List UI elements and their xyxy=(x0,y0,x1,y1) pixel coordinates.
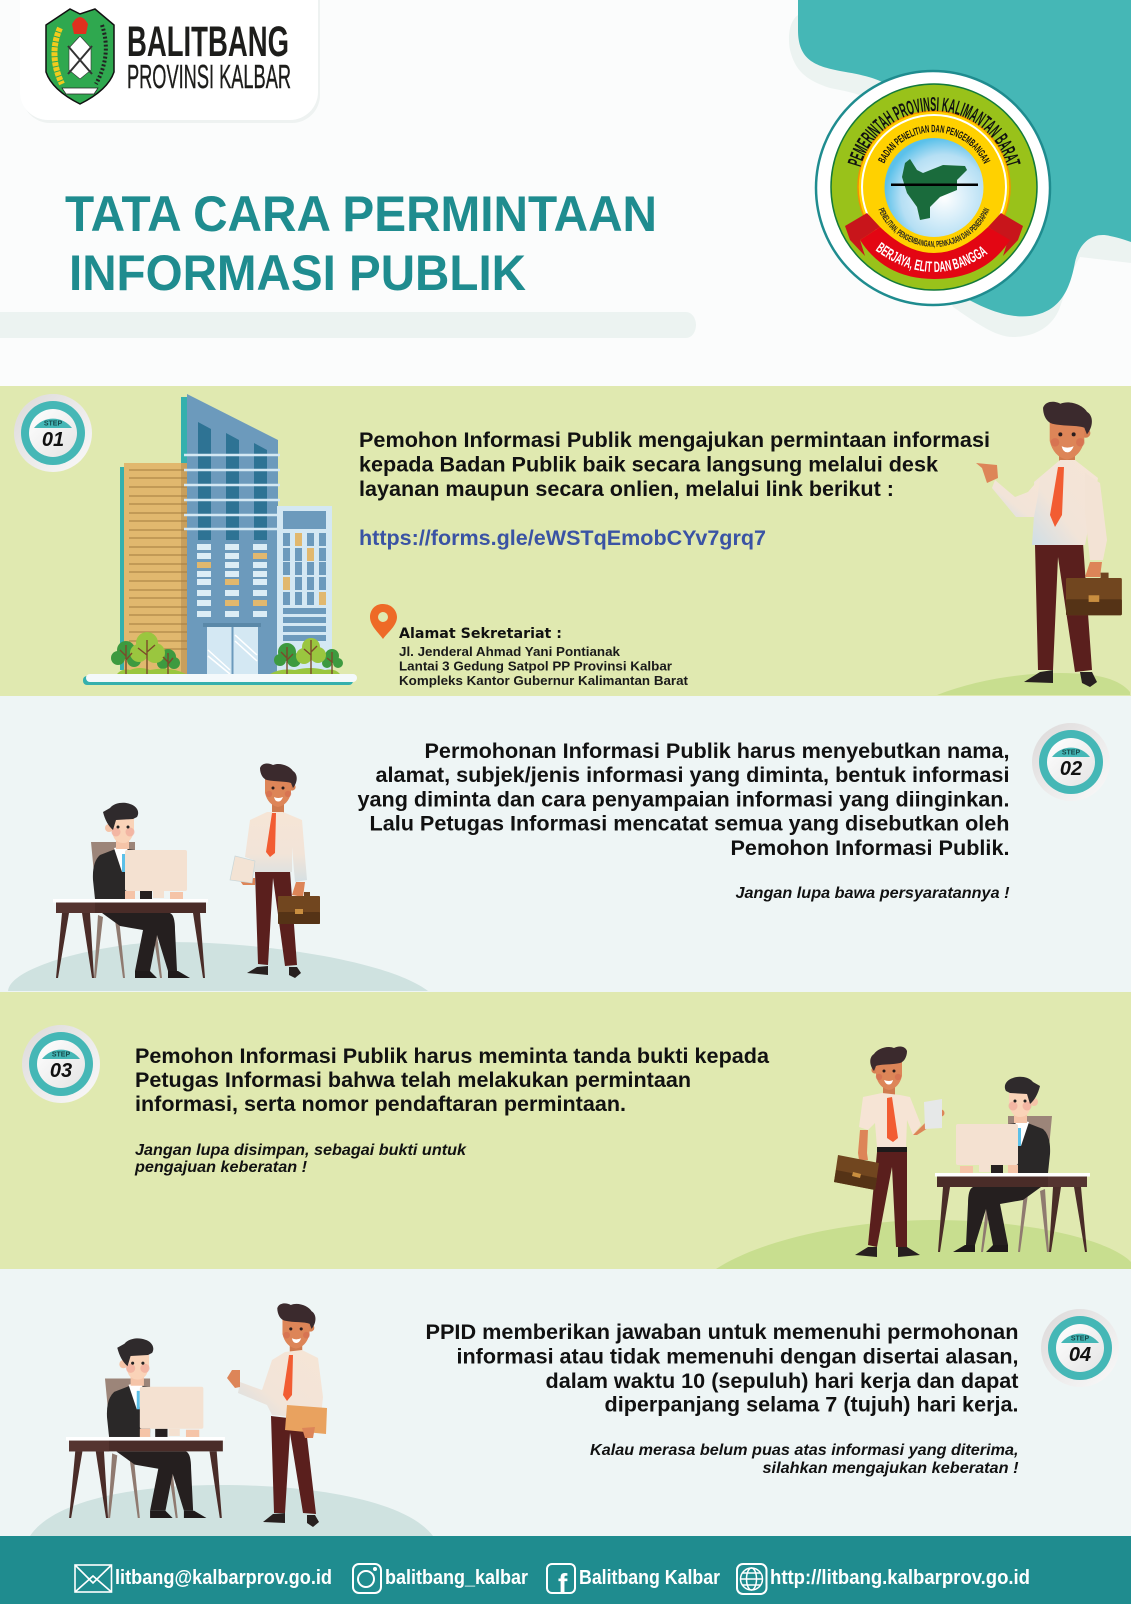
address: Jl. Jenderal Ahmad Yani Pontianak xyxy=(399,644,621,659)
ground ellipse xyxy=(30,1485,433,1536)
step 4 text: dalam waktu 10 (sepuluh) hari kerja dan dapat xyxy=(546,1369,1018,1393)
step 2 badge: 02 xyxy=(1060,758,1082,780)
title underline bar xyxy=(0,312,696,338)
ground ellipse xyxy=(716,1220,1131,1269)
icon: location pin xyxy=(370,604,397,639)
seal arc texts: PEMERINTAH PROVINSI KALIMANTAN BARAT xyxy=(848,97,1021,167)
logo text xyxy=(127,18,291,95)
seal arc texts: BADAN PENELITIAN DAN PENGEMBANGAN xyxy=(878,124,990,164)
step 3 badge: STEP xyxy=(52,1052,70,1058)
address: Alamat Sekretariat : xyxy=(399,626,562,642)
step 1 text: kepada Badan Publik baik secara langsung melalui desk xyxy=(359,452,938,476)
step 2 badge xyxy=(1032,723,1110,801)
man pointing with briefcase xyxy=(976,402,1122,687)
step 3 note: Jangan lupa disimpan, sebagai bukti untuk xyxy=(135,1142,467,1159)
step 2 note: Jangan lupa bawa persyaratannya ! xyxy=(736,885,1010,902)
icon: Kalimantan Barat shield xyxy=(46,9,114,104)
step 4 note: silahkan mengajukan keberatan ! xyxy=(762,1460,1018,1477)
instagram handle: balitbang_kalbar xyxy=(385,1567,528,1589)
step 4 badge: STEP xyxy=(1071,1336,1089,1342)
step 4 note xyxy=(590,1442,1018,1477)
email: litbang@kalbarprov.go.id xyxy=(115,1567,332,1589)
step 3 note: pengajuan keberatan ! xyxy=(134,1159,307,1176)
step 4 text: informasi atau tidak memenuhi dengan disertai alasan, xyxy=(456,1344,1018,1368)
seal arc texts: PENELITIAN, PENGEMBANGAN, PENKAJIAN DAN PENERAPAN xyxy=(878,208,990,248)
facebook name: Balitbang Kalbar xyxy=(579,1567,720,1589)
step 2 badge: STEP xyxy=(1062,750,1080,756)
step 1 badge xyxy=(14,394,92,472)
footer contact bar xyxy=(0,1536,1131,1604)
step 3 note xyxy=(134,1142,467,1176)
title: TATA CARA PERMINTAAN xyxy=(65,186,657,242)
address xyxy=(399,626,689,688)
step 3 text: informasi, serta nomor pendaftaran permintaan. xyxy=(135,1092,626,1116)
standing man waving with folder xyxy=(227,1303,327,1527)
title xyxy=(65,186,657,301)
decorative blob: teal xyxy=(798,0,1131,316)
step 3 badge: 03 xyxy=(50,1060,72,1082)
seal arc texts xyxy=(848,97,1021,248)
red ribbon: BERJAYA, ELIT DAN BANGGA xyxy=(876,242,988,272)
website: http://litbang.kalbarprov.go.id xyxy=(770,1567,1030,1589)
step 3 badge xyxy=(22,1025,100,1103)
step 1 text: layanan maupun secara onlien, melalui link berikut : xyxy=(359,477,894,501)
address: Lantai 3 Gedung Satpol PP Provinsi Kalbar xyxy=(399,658,672,674)
seated officer at desk xyxy=(53,803,208,978)
step 2 text: alamat, subjek/jenis informasi yang diminta, bentuk informasi xyxy=(376,763,1010,787)
step 1 text xyxy=(359,428,990,501)
icon: globe xyxy=(737,1564,766,1594)
link: https://forms.gle/eWSTqEmobCYv7grq7 xyxy=(359,526,766,550)
ground ellipse xyxy=(8,942,428,991)
icon: facebook xyxy=(547,1564,575,1599)
logo text: PROVINSI KALBAR xyxy=(127,58,291,95)
step 4 badge xyxy=(1041,1309,1119,1387)
step 1 badge: STEP xyxy=(44,420,62,428)
step 2 text xyxy=(358,739,1010,860)
standing man handing a receipt xyxy=(834,1046,944,1257)
step 2 text: Lalu Petugas Informasi mencatat semua yang disebutkan oleh xyxy=(370,812,1010,836)
step 3 text xyxy=(135,1044,770,1116)
step 4 text: diperpanjang selama 7 (tujuh) hari kerja. xyxy=(604,1393,1018,1417)
logo text: BALITBANG xyxy=(127,18,289,66)
panel: step 3 xyxy=(0,992,1131,1269)
building illustration xyxy=(83,394,357,685)
step 1 badge: 01 xyxy=(42,429,64,451)
step 3 text: Pemohon Informasi Publik harus meminta tanda bukti kepada xyxy=(135,1044,770,1068)
title: INFORMASI PUBLIK xyxy=(69,245,526,301)
standing man with paper and briefcase xyxy=(230,763,320,978)
ground ellipse xyxy=(937,673,1130,695)
map of West Kalimantan xyxy=(902,159,967,220)
logo card xyxy=(20,0,320,123)
step 4 text: PPID memberikan jawaban untuk memenuhi permohonan xyxy=(426,1320,1018,1344)
step 2 text: Permohonan Informasi Publik harus menyebutkan nama, xyxy=(424,739,1010,763)
round agency seal xyxy=(814,70,1052,306)
panel: step 1 xyxy=(0,386,1131,696)
step 2 text: Pemohon Informasi Publik. xyxy=(730,836,1010,860)
icon: instagram xyxy=(353,1564,381,1593)
panel: step 4 xyxy=(0,1269,1131,1536)
step 4 text xyxy=(426,1320,1018,1417)
step 3 text: Petugas Informasi bahwa telah melakukan permintaan xyxy=(135,1068,691,1092)
address: Kompleks Kantor Gubernur Kalimantan Barat xyxy=(399,673,689,688)
step 1 text: Pemohon Informasi Publik mengajukan permintaan informasi xyxy=(359,428,990,452)
seated officer at desk xyxy=(66,1338,225,1518)
step 2 text: yang diminta dan cara penyampaian informasi yang diinginkan. xyxy=(358,787,1010,811)
seated officer at desk, mirrored xyxy=(935,1077,1090,1252)
icon: envelope xyxy=(75,1565,112,1592)
panel: step 2 xyxy=(0,696,1131,992)
decorative blob: light shadow xyxy=(789,15,1131,337)
step 4 badge: 04 xyxy=(1069,1344,1091,1366)
red ribbon xyxy=(845,213,1023,279)
step 4 note: Kalau merasa belum puas atas informasi yang diterima, xyxy=(590,1442,1018,1459)
icon: facebook: f xyxy=(558,1568,568,1599)
